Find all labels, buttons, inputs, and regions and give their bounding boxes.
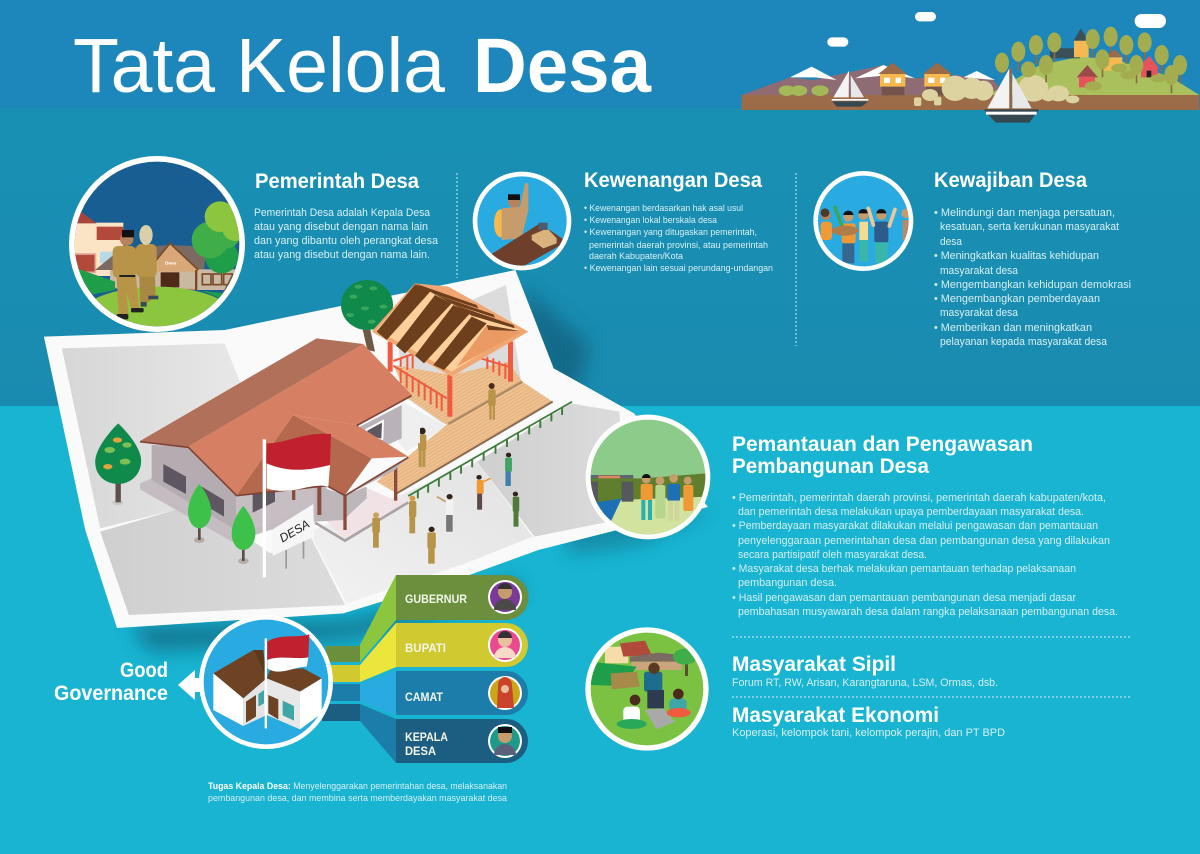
list: • Melindungi dan menjaga persatuan, (934, 207, 1115, 219)
list: masyarakat desa (940, 307, 1019, 319)
icon: officials in front of village hall: Desa (165, 260, 177, 265)
tier: Kepala Desa: DESA (405, 744, 436, 758)
header band (0, 0, 1200, 108)
text block: • Pemerintah, pemerintah daerah provinsi, pemerintah daerah kabupaten/kota, (732, 492, 1106, 504)
tier: Camat (396, 671, 528, 715)
tree behind building (341, 280, 393, 352)
left tree (95, 423, 141, 505)
text block: • Hasil pengawasan dan pemantauan pembangunan desa menjadi dasar (732, 592, 1076, 604)
list: • Kewenangan yang ditugaskan pemerintah, (584, 227, 757, 238)
small trees, flag and sign: DESA (277, 517, 312, 545)
man on deck (418, 428, 426, 467)
tier: Bupati (396, 623, 528, 667)
Good Governance label (54, 659, 168, 705)
map shadow (130, 285, 712, 652)
Tugas Kepala Desa note: pembangunan desa, dan membina serta memberdayakan masyarakat desa (208, 793, 508, 804)
panel: Pemerintah Desa (69, 156, 438, 332)
list: • Kewenangan lokal berskala desa (584, 215, 718, 226)
panel: Good Governance hierarchy (54, 575, 528, 804)
text block: atau yang disebut dengan nama lain. (254, 249, 430, 261)
heading: Masyarakat Ekonomi: Masyarakat Ekonomi (732, 704, 939, 727)
heading: Kewenangan Desa (584, 169, 762, 192)
arrow (178, 670, 202, 700)
tier: Kepala Desa: KEPALA (405, 730, 448, 744)
text: Masyarakat Ekonomi members: Koperasi, kelompok tani, kelompok perajin, dan PT BPD (732, 727, 1005, 739)
list: desa (940, 236, 963, 248)
icon: villagers sitting on grass (585, 627, 710, 751)
village office building (140, 338, 420, 542)
text block: Pemerintah Desa adalah Kepala Desa (254, 207, 431, 219)
panel: Kewajiban Desa (813, 169, 1131, 348)
Tugas Kepala Desa note (208, 781, 508, 804)
header landscape illustration (742, 12, 1199, 123)
list: • Kewenangan berdasarkan hak asal usul (584, 203, 743, 214)
icon: villagers at irrigation dam (586, 415, 710, 540)
text block: dan pemerintah desa melakukan upaya pemberdayaan masyarakat desa. (738, 506, 1084, 518)
background: middle band (0, 108, 1200, 406)
text block: • Masyarakat desa berhak melakukan pemantauan terhadap pelaksanaan (732, 563, 1076, 575)
icon: official at desk (473, 172, 573, 273)
text block: pembangunan desa. (738, 577, 837, 589)
text block: atau yang disebut dengan nama lain (254, 221, 428, 233)
icon: group of villagers (813, 170, 913, 273)
icon: officials in front of village hall (69, 156, 245, 332)
Good Governance label: Good (120, 659, 168, 682)
tier: Bupati: BUPATI (405, 641, 446, 655)
icon: village house with flag (199, 615, 333, 749)
title: Tata Kelola (73, 23, 445, 109)
tier: Gubernur (396, 575, 528, 620)
list: • Mengembangkan pemberdayaan (934, 293, 1100, 305)
title (73, 23, 652, 109)
divider (732, 636, 1131, 638)
divider (732, 696, 1131, 698)
list: pemerintah daerah provinsi, atau pemerintah (589, 240, 768, 251)
small trees, flag and sign (188, 434, 331, 577)
list: • Kewenangan lain sesuai perundang-undangan (584, 263, 773, 274)
list: kesatuan, serta kerukunan masyarakat (940, 221, 1119, 233)
villagers and officials (372, 453, 519, 564)
title: Desa (473, 23, 652, 109)
tier: Camat: CAMAT (405, 690, 444, 704)
panel: Pemantauan dan Pengawasan (586, 415, 1118, 618)
map sheet (44, 270, 708, 628)
deck and gazebo (372, 283, 553, 493)
text block: penyelenggaraan pemerintahan desa dan pembangunan desa yang dilakukan (738, 535, 1110, 547)
Good Governance label: Governance (54, 682, 168, 705)
tier: Kepala Desa (396, 719, 528, 763)
heading: Pemantauan dan Pengawasan (732, 433, 1033, 456)
text block (732, 492, 1118, 618)
heading: Pemerintah Desa (255, 170, 419, 193)
list: daerah Kabupaten/Kota (589, 251, 684, 262)
list: masyarakat desa (940, 265, 1019, 277)
text: Masyarakat Sipil members: Forum RT, RW, Arisan, Karangtaruna, LSM, Ormas, dsb. (732, 677, 998, 689)
text block: • Pemberdayaan masyarakat dilakukan melalui pengawasan dan pemantauan (732, 520, 1098, 532)
text block: pembahasan musyawarah desa dalam rangka pelaksanaan pembangunan desa. (738, 606, 1118, 618)
heading (732, 433, 1033, 478)
panel: Kewenangan Desa (473, 169, 773, 274)
ribbons (322, 575, 396, 763)
list (934, 207, 1131, 348)
text block: secara partisipatif oleh masyarakat desa. (738, 549, 927, 561)
panel: Masyarakat Sipil and Ekonomi (585, 627, 1131, 751)
heading: Pembangunan Desa (732, 455, 929, 478)
Tugas Kepala Desa note: Tugas Kepala Desa: Menyelenggarakan pemerintahan desa, melaksanakan (208, 781, 507, 792)
list: pelayanan kepada masyarakat desa (940, 336, 1108, 348)
fence (408, 402, 572, 498)
heading: Masyarakat Sipil: Masyarakat Sipil (732, 653, 896, 676)
paper map with village office scene (44, 270, 712, 652)
list: • Mengembangkan kehidupan demokrasi (934, 279, 1131, 291)
divider right (795, 173, 797, 346)
text block (254, 207, 439, 261)
tier: Gubernur: GUBERNUR (405, 592, 467, 606)
list (584, 203, 773, 274)
list: • Memberikan dan meningkatkan (934, 322, 1092, 334)
woman on deck (488, 383, 496, 420)
divider left (456, 173, 458, 278)
list: • Meningkatkan kualitas kehidupan (934, 250, 1099, 262)
heading: Kewajiban Desa (934, 169, 1087, 192)
text block: dan yang dibantu oleh perangkat desa (254, 235, 439, 247)
